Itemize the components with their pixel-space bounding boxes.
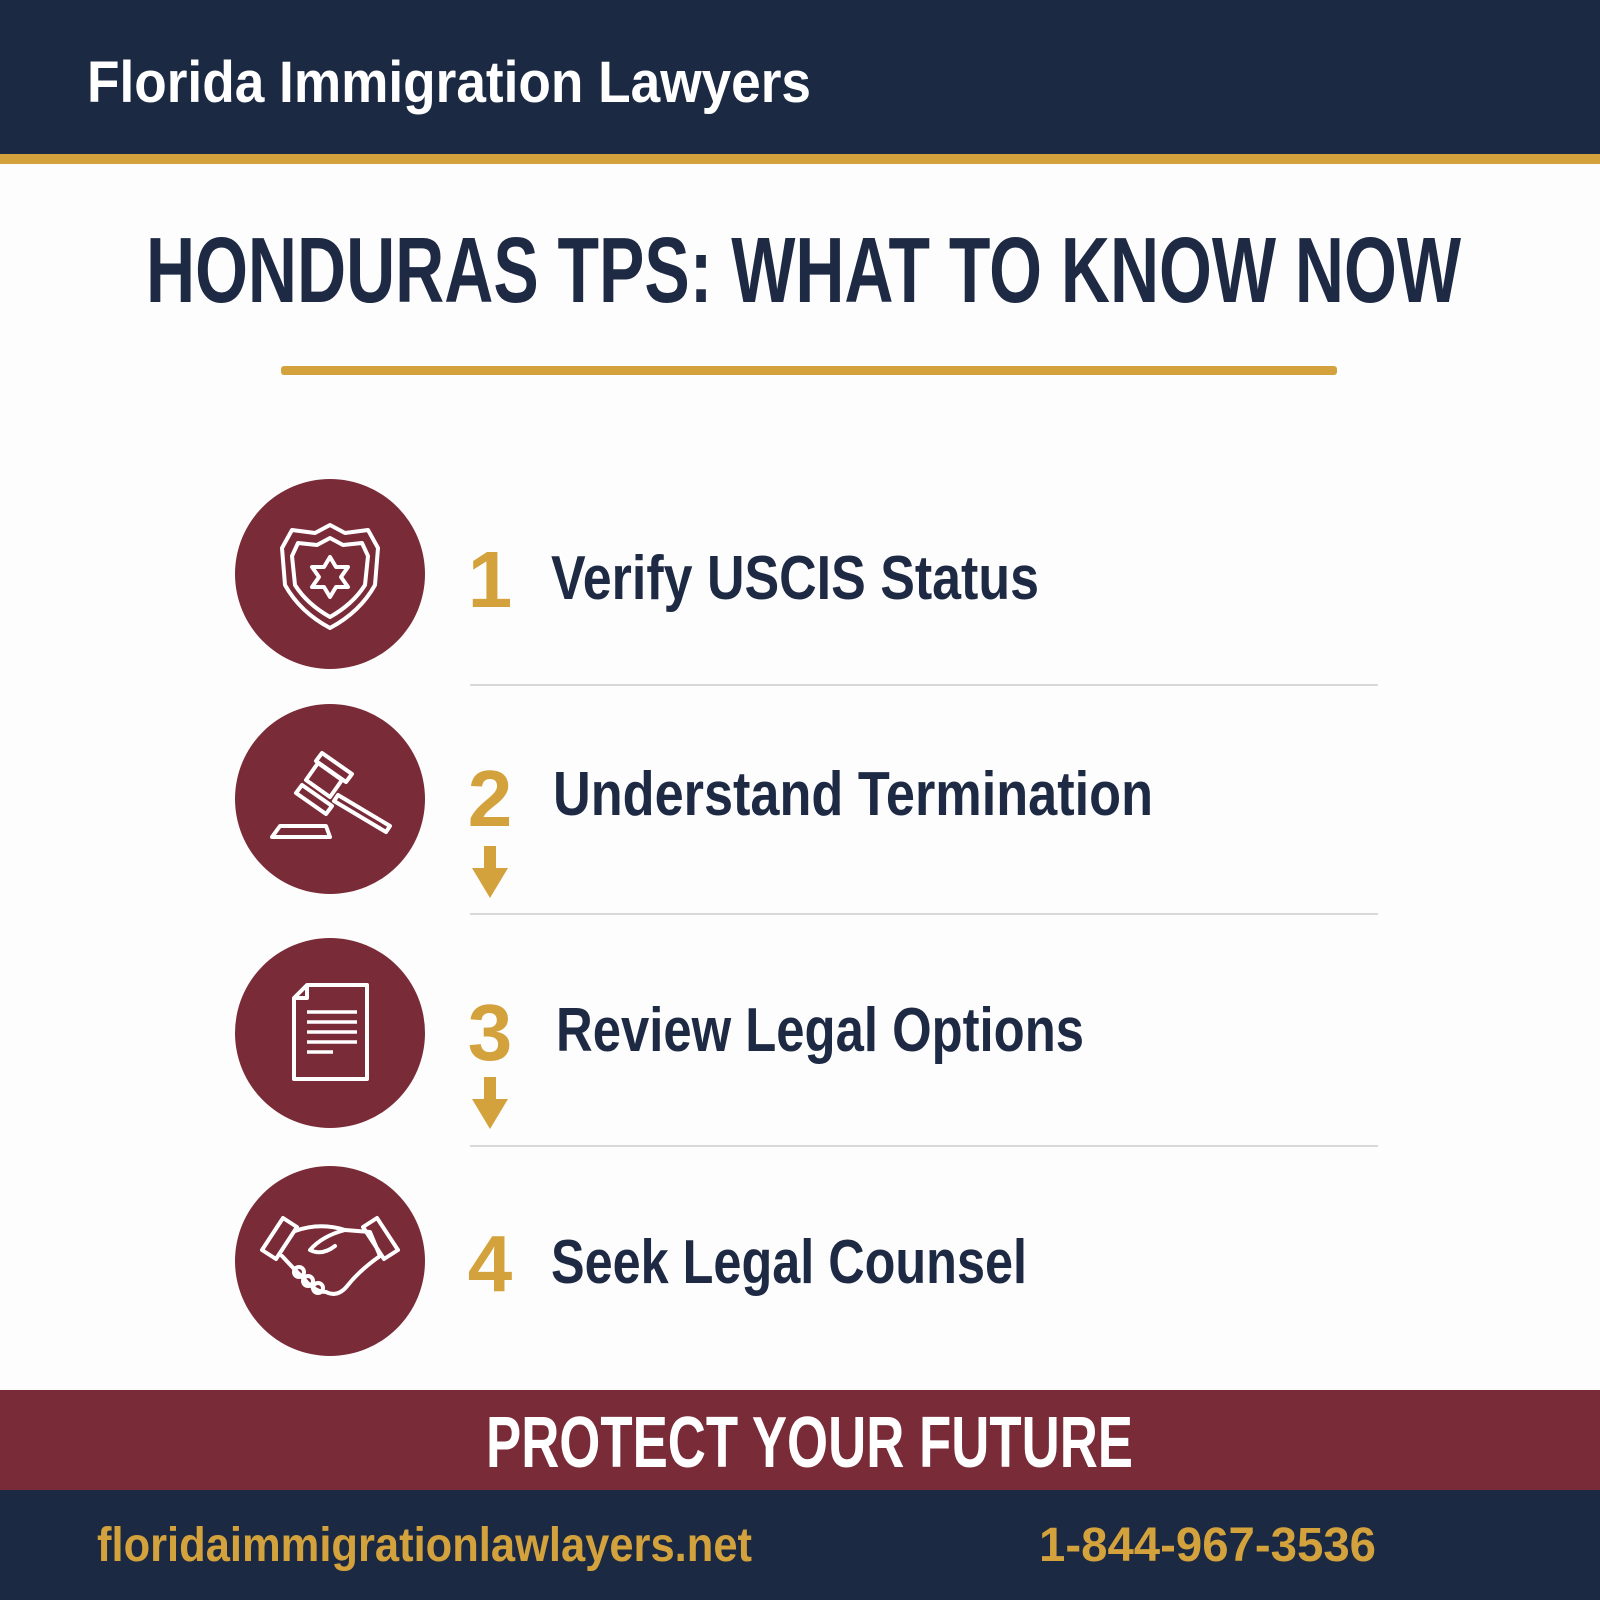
arrow down xyxy=(472,846,508,898)
header bar xyxy=(0,0,1600,164)
step 1 xyxy=(235,479,1039,669)
header text: Florida Immigration Lawyers xyxy=(87,50,811,115)
label 1: Verify USCIS Status xyxy=(551,544,1039,613)
step 2 xyxy=(235,704,1153,898)
icon: gavel xyxy=(235,704,425,894)
phone: 1-844-967-3536 xyxy=(1039,1519,1376,1572)
icon: handshake xyxy=(235,1166,425,1356)
step 3 xyxy=(235,938,1084,1129)
label 3: Review Legal Options xyxy=(556,996,1084,1065)
website: floridaimmigrationlawlayers.net xyxy=(97,1519,752,1572)
label 4: Seek Legal Counsel xyxy=(551,1228,1027,1297)
title underline xyxy=(281,366,1337,375)
step 4 xyxy=(235,1166,1027,1356)
footer xyxy=(0,1490,1600,1600)
number 1: 1 xyxy=(468,535,512,624)
arrow down xyxy=(472,1077,508,1129)
icon: document xyxy=(235,938,425,1128)
label 2: Understand Termination xyxy=(553,760,1153,829)
banner: protect your future: PROTECT YOUR FUTURE xyxy=(486,1403,1133,1483)
number 4: 4 xyxy=(468,1219,513,1308)
number 2: 2 xyxy=(468,754,512,843)
number 3: 3 xyxy=(468,988,512,1077)
icon: badge xyxy=(235,479,425,669)
banner: protect your future xyxy=(0,1390,1600,1491)
